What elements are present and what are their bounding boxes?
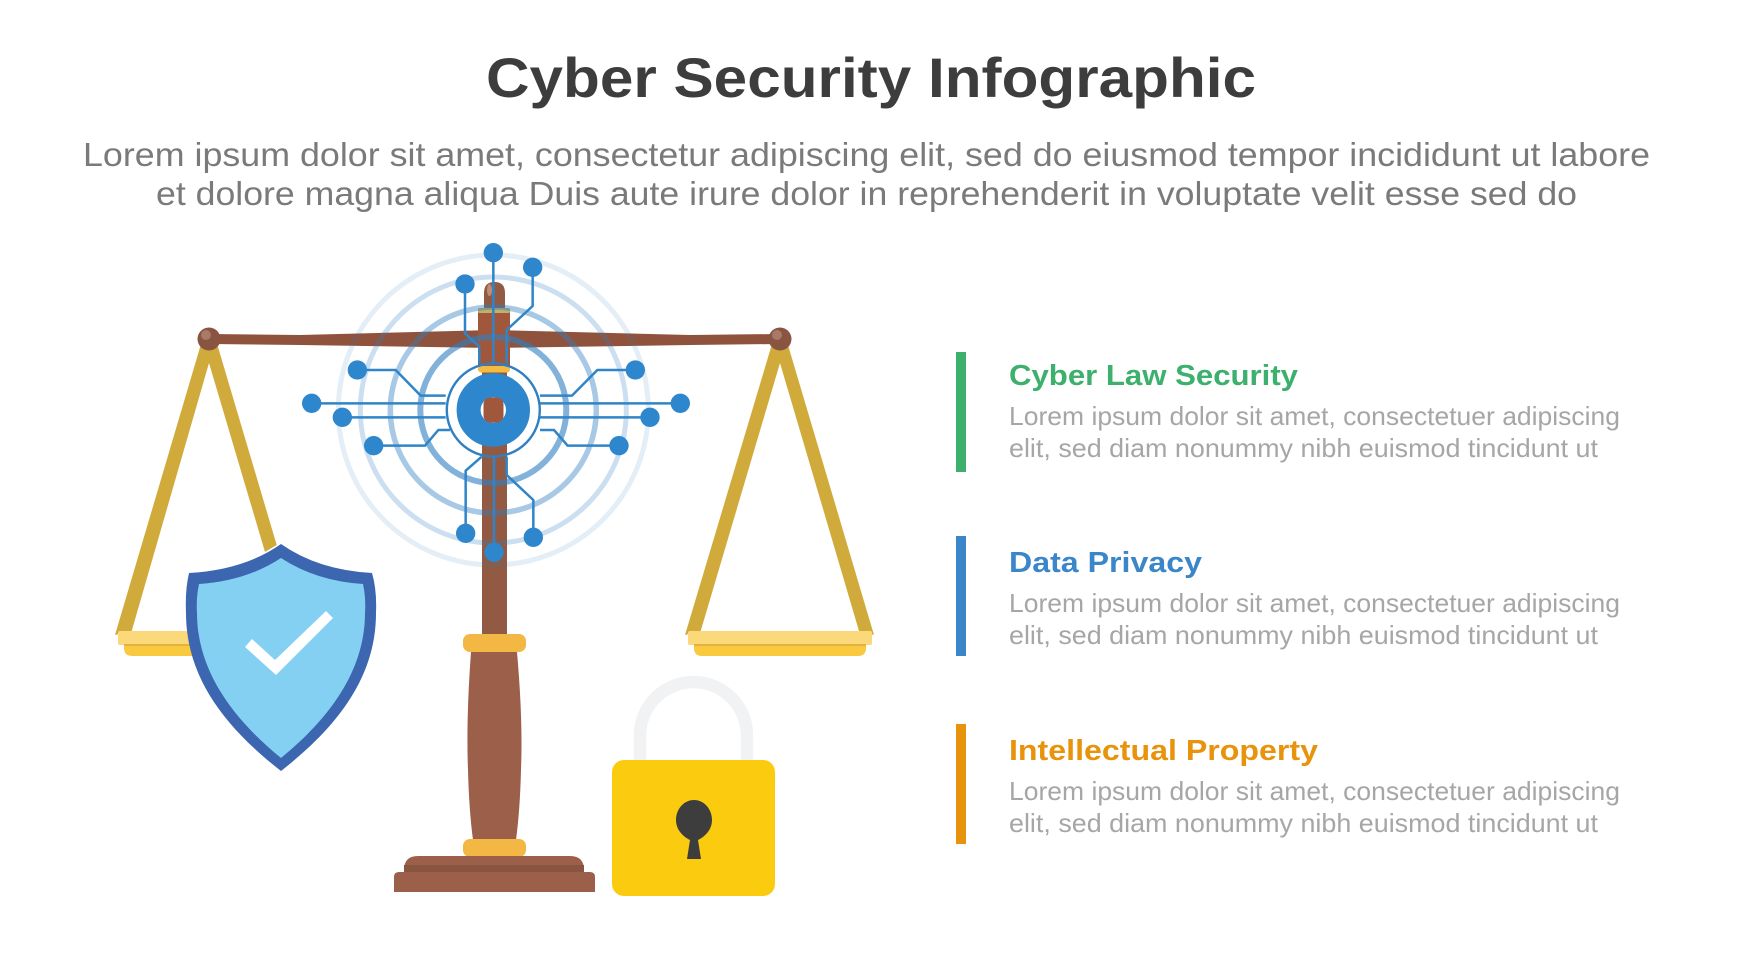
description: elit, sed diam nonummy nibh euismod tincidunt ut: [1009, 620, 1599, 650]
check mark: [245, 611, 333, 675]
illustration: justice scale: [115, 282, 874, 892]
inner thin ring: [447, 364, 540, 456]
upper gold collar: [463, 634, 526, 652]
heading: Intellectual Property: [1009, 735, 1318, 767]
subtitle text block: et dolore magna aliqua Duis aute irure dolor in reprehenderit in voluptate velit esse sed do: [156, 175, 1577, 212]
description: Lorem ipsum dolor sit amet, consectetuer adipiscing: [1009, 588, 1620, 618]
central hub: [469, 385, 518, 435]
title: Cyber Security Infographic: [486, 46, 1256, 109]
accent bar: [956, 724, 966, 844]
panel: Data Privacy: [956, 536, 1620, 656]
lower gold collar: [463, 839, 526, 857]
scale beam: [209, 330, 779, 348]
shaft: [467, 652, 522, 840]
description: [1009, 776, 1620, 838]
heading: Data Privacy: [1009, 547, 1202, 579]
icon: padlock: [612, 682, 775, 896]
accent bar: [956, 536, 966, 656]
description: [1009, 588, 1620, 650]
circuit nodes: [302, 243, 690, 562]
heading: Cyber Law Security: [1009, 360, 1298, 392]
circuit lines: [312, 253, 680, 552]
scale post: [482, 282, 507, 636]
scale left pan: [115, 345, 298, 656]
scale right pan: [685, 345, 874, 656]
icon: shield with check: [186, 544, 376, 771]
description: Lorem ipsum dolor sit amet, consectetuer adipiscing: [1009, 401, 1620, 431]
concentric rings: [338, 255, 648, 565]
post collar: [478, 308, 510, 372]
lock body: [612, 760, 775, 896]
description: Lorem ipsum dolor sit amet, consectetuer adipiscing: [1009, 776, 1620, 806]
keyhole: [676, 800, 712, 859]
beam pivots: [198, 328, 792, 350]
subtitle text block: Lorem ipsum dolor sit amet, consectetur adipiscing elit, sed do eiusmod tempor incididunt ut labore: [83, 136, 1650, 173]
description: elit, sed diam nonummy nibh euismod tincidunt ut: [1009, 808, 1599, 838]
accent bar: [956, 352, 966, 472]
description: elit, sed diam nonummy nibh euismod tincidunt ut: [1009, 433, 1599, 463]
panel: Intellectual Property: [956, 724, 1620, 844]
panel: Cyber Law Security: [956, 352, 1620, 472]
shackle: [640, 682, 747, 762]
base: [394, 856, 595, 892]
description: [1009, 401, 1620, 463]
circuit target over the scale: [302, 243, 690, 565]
subtitle text block: [83, 136, 1650, 212]
